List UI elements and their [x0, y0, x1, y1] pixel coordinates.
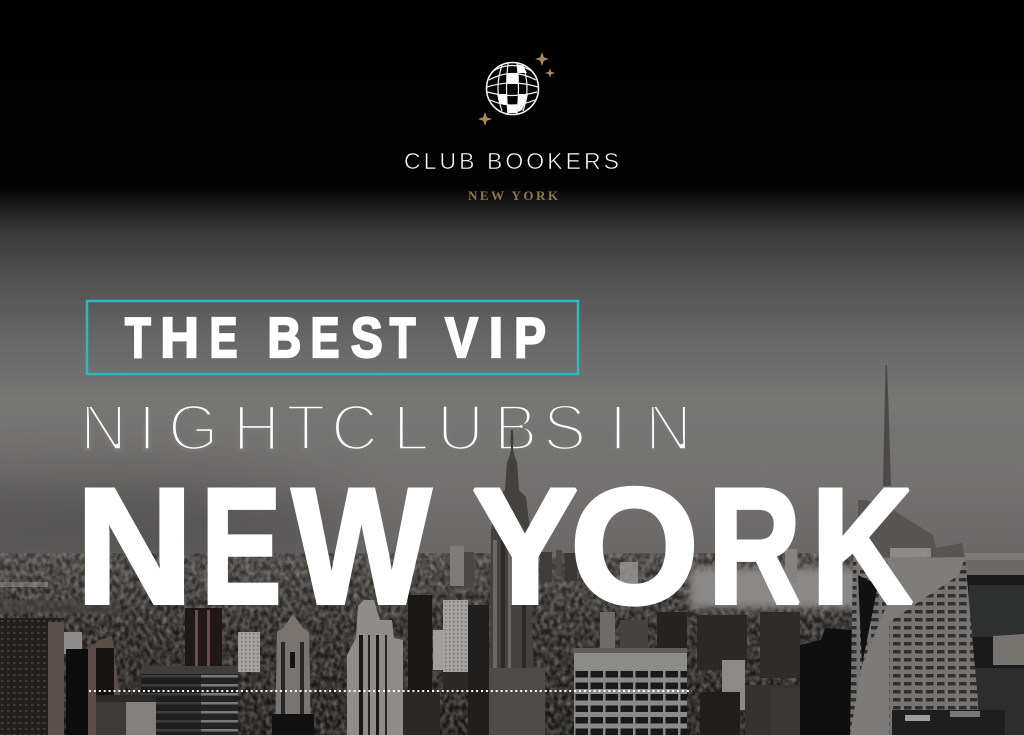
heading box: the best vip [87, 301, 578, 374]
white office block [574, 648, 687, 735]
heading box: the best vip: S [351, 306, 383, 370]
heading box: the best vip: T [390, 306, 416, 370]
heading box: the best vip: E [310, 306, 340, 370]
location label: NEW YORK [468, 188, 559, 203]
empire state spire over text [511, 430, 513, 452]
heading line: new york: Y [472, 454, 578, 638]
heading box: the best vip: V [445, 306, 478, 370]
skyline photo [0, 365, 1024, 735]
icon: gold sparkles [478, 52, 555, 126]
dark block and pink tower [66, 636, 120, 735]
empire state building [480, 430, 545, 735]
distant city [0, 546, 1024, 735]
heading line: new york: O [570, 454, 699, 638]
black tower [770, 628, 852, 735]
icon: disco ball [486, 62, 538, 114]
tall stone tower [347, 600, 440, 735]
striped building [141, 666, 238, 735]
heading line: new york: W [292, 454, 431, 638]
heading box: the best vip: I [489, 306, 503, 370]
bank of america tower [850, 365, 978, 735]
logo [404, 52, 619, 203]
heading box: the best vip: E [210, 306, 238, 370]
left foreground building [0, 618, 82, 735]
ornate tower [272, 614, 314, 735]
heading box: the best vip: P [514, 306, 546, 370]
heading line: new york: R [708, 454, 801, 638]
right dark buildings [967, 575, 1024, 735]
heading line: new york: N [76, 454, 193, 638]
heading box: the best vip: H [160, 306, 199, 370]
heading line: new york: K [811, 454, 913, 638]
heading line: nightclubs in: NIGHTCLUBS IN [80, 391, 692, 464]
heading line: new york: E [201, 454, 282, 638]
midtown towers [185, 595, 800, 735]
dotted divider [89, 690, 692, 692]
title [76, 301, 913, 638]
heading box: the best vip: B [267, 306, 301, 370]
roof of low right building [892, 710, 1005, 735]
brand name: CLUB BOOKERS [404, 148, 619, 174]
low grey building [96, 695, 156, 735]
heading line: new york [76, 454, 913, 638]
heading box: the best vip: T [125, 306, 151, 370]
